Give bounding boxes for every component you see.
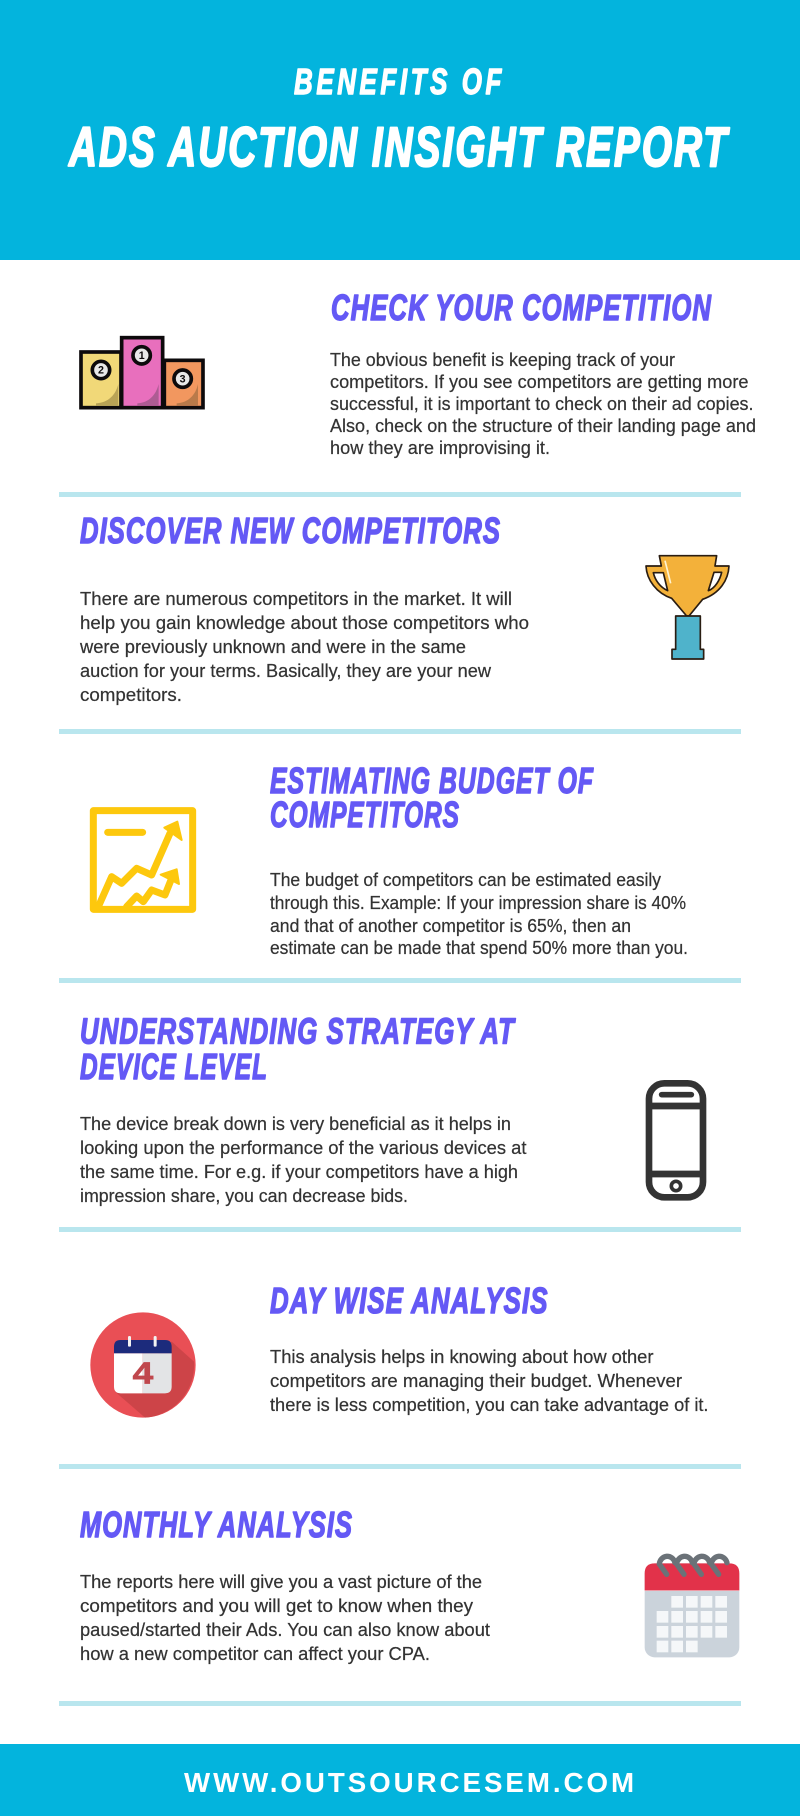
footer banner [0,1744,800,1816]
heading: DEVICE LEVEL [80,1046,268,1087]
body text: how they are improvising it. [330,438,550,458]
body text: The budget of competitors can be estimated easily [270,870,661,890]
website url: WWW.OUTSOURCESEM.COM [184,1767,637,1798]
icon: calendar day badge [90,1312,196,1418]
body text: there is less competition, you can take advantage of it. [270,1395,708,1415]
title kicker: BENEFITS OF [294,61,505,102]
body text: help you gain knowledge about those competitors who [80,613,529,633]
panel: day wise analysis [90,1280,708,1418]
body text: The obvious benefit is keeping track of your [330,350,675,370]
icon: podium: 3 [180,373,186,385]
body text [270,1347,708,1415]
body text [80,1114,526,1206]
icon: wall calendar [645,1556,739,1657]
body text: competitors and you will get to know when they [80,1596,473,1616]
icon: smartphone [649,1083,703,1197]
icon: growth chart [93,811,193,909]
body text: successful, it is important to check on their ad copies. [330,394,754,414]
body text: how a new competitor can affect your CPA. [80,1644,430,1664]
body text: the same time. For e.g. if your competitors have a high [80,1162,518,1182]
heading [270,760,594,835]
body text: looking upon the performance of the various devices at [80,1138,526,1158]
heading: MONTHLY ANALYSIS [80,1504,353,1545]
body text: auction for your terms. Basically, they are your new [80,661,492,681]
body text: competitors. If you see competitors are getting more [330,372,748,392]
body text: paused/started their Ads. You can also know about [80,1620,490,1640]
heading: DAY WISE ANALYSIS [270,1280,548,1321]
panel: monthly analysis [80,1504,739,1664]
body text: The reports here will give you a vast picture of the [80,1572,482,1592]
icon: podium: 2 [98,365,104,377]
icon: podium [81,338,203,408]
body text: estimate can be made that spend 50% more than you. [270,938,688,958]
body text: through this. Example: If your impression share is 40% [270,893,686,913]
icon: podium: 1 [139,350,145,362]
panel: check your competition [81,287,756,458]
body text: The device break down is very beneficial as it helps in [80,1114,511,1134]
body text: and that of another competitor is 65%, then an [270,916,631,936]
heading: ESTIMATING BUDGET OF [270,760,594,801]
body text: There are numerous competitors in the market. It will [80,589,512,609]
header banner [0,0,800,260]
body text [80,1572,490,1664]
body text: competitors are managing their budget. Whenever [270,1371,682,1391]
panel: estimating budget of competitors [93,760,688,958]
icon: calendar day badge: 4 [133,1356,153,1390]
body text: Also, check on the structure of their landing page and [330,416,756,436]
body text [270,870,688,958]
heading: COMPETITORS [270,794,460,835]
icon: trophy [646,556,729,659]
body text [79,589,529,705]
heading [80,1010,516,1087]
body text: competitors. [80,685,182,705]
body text: This analysis helps in knowing about how other [270,1347,654,1367]
panel: discover new competitors [79,510,729,705]
body text [330,350,756,458]
heading: DISCOVER NEW COMPETITORS [80,510,501,551]
heading: UNDERSTANDING STRATEGY AT [80,1010,516,1052]
body text: impression share, you can decrease bids. [80,1186,408,1206]
body text: were previously unknown and were in the same [79,637,466,657]
panel: understanding strategy at device level [80,1010,703,1206]
